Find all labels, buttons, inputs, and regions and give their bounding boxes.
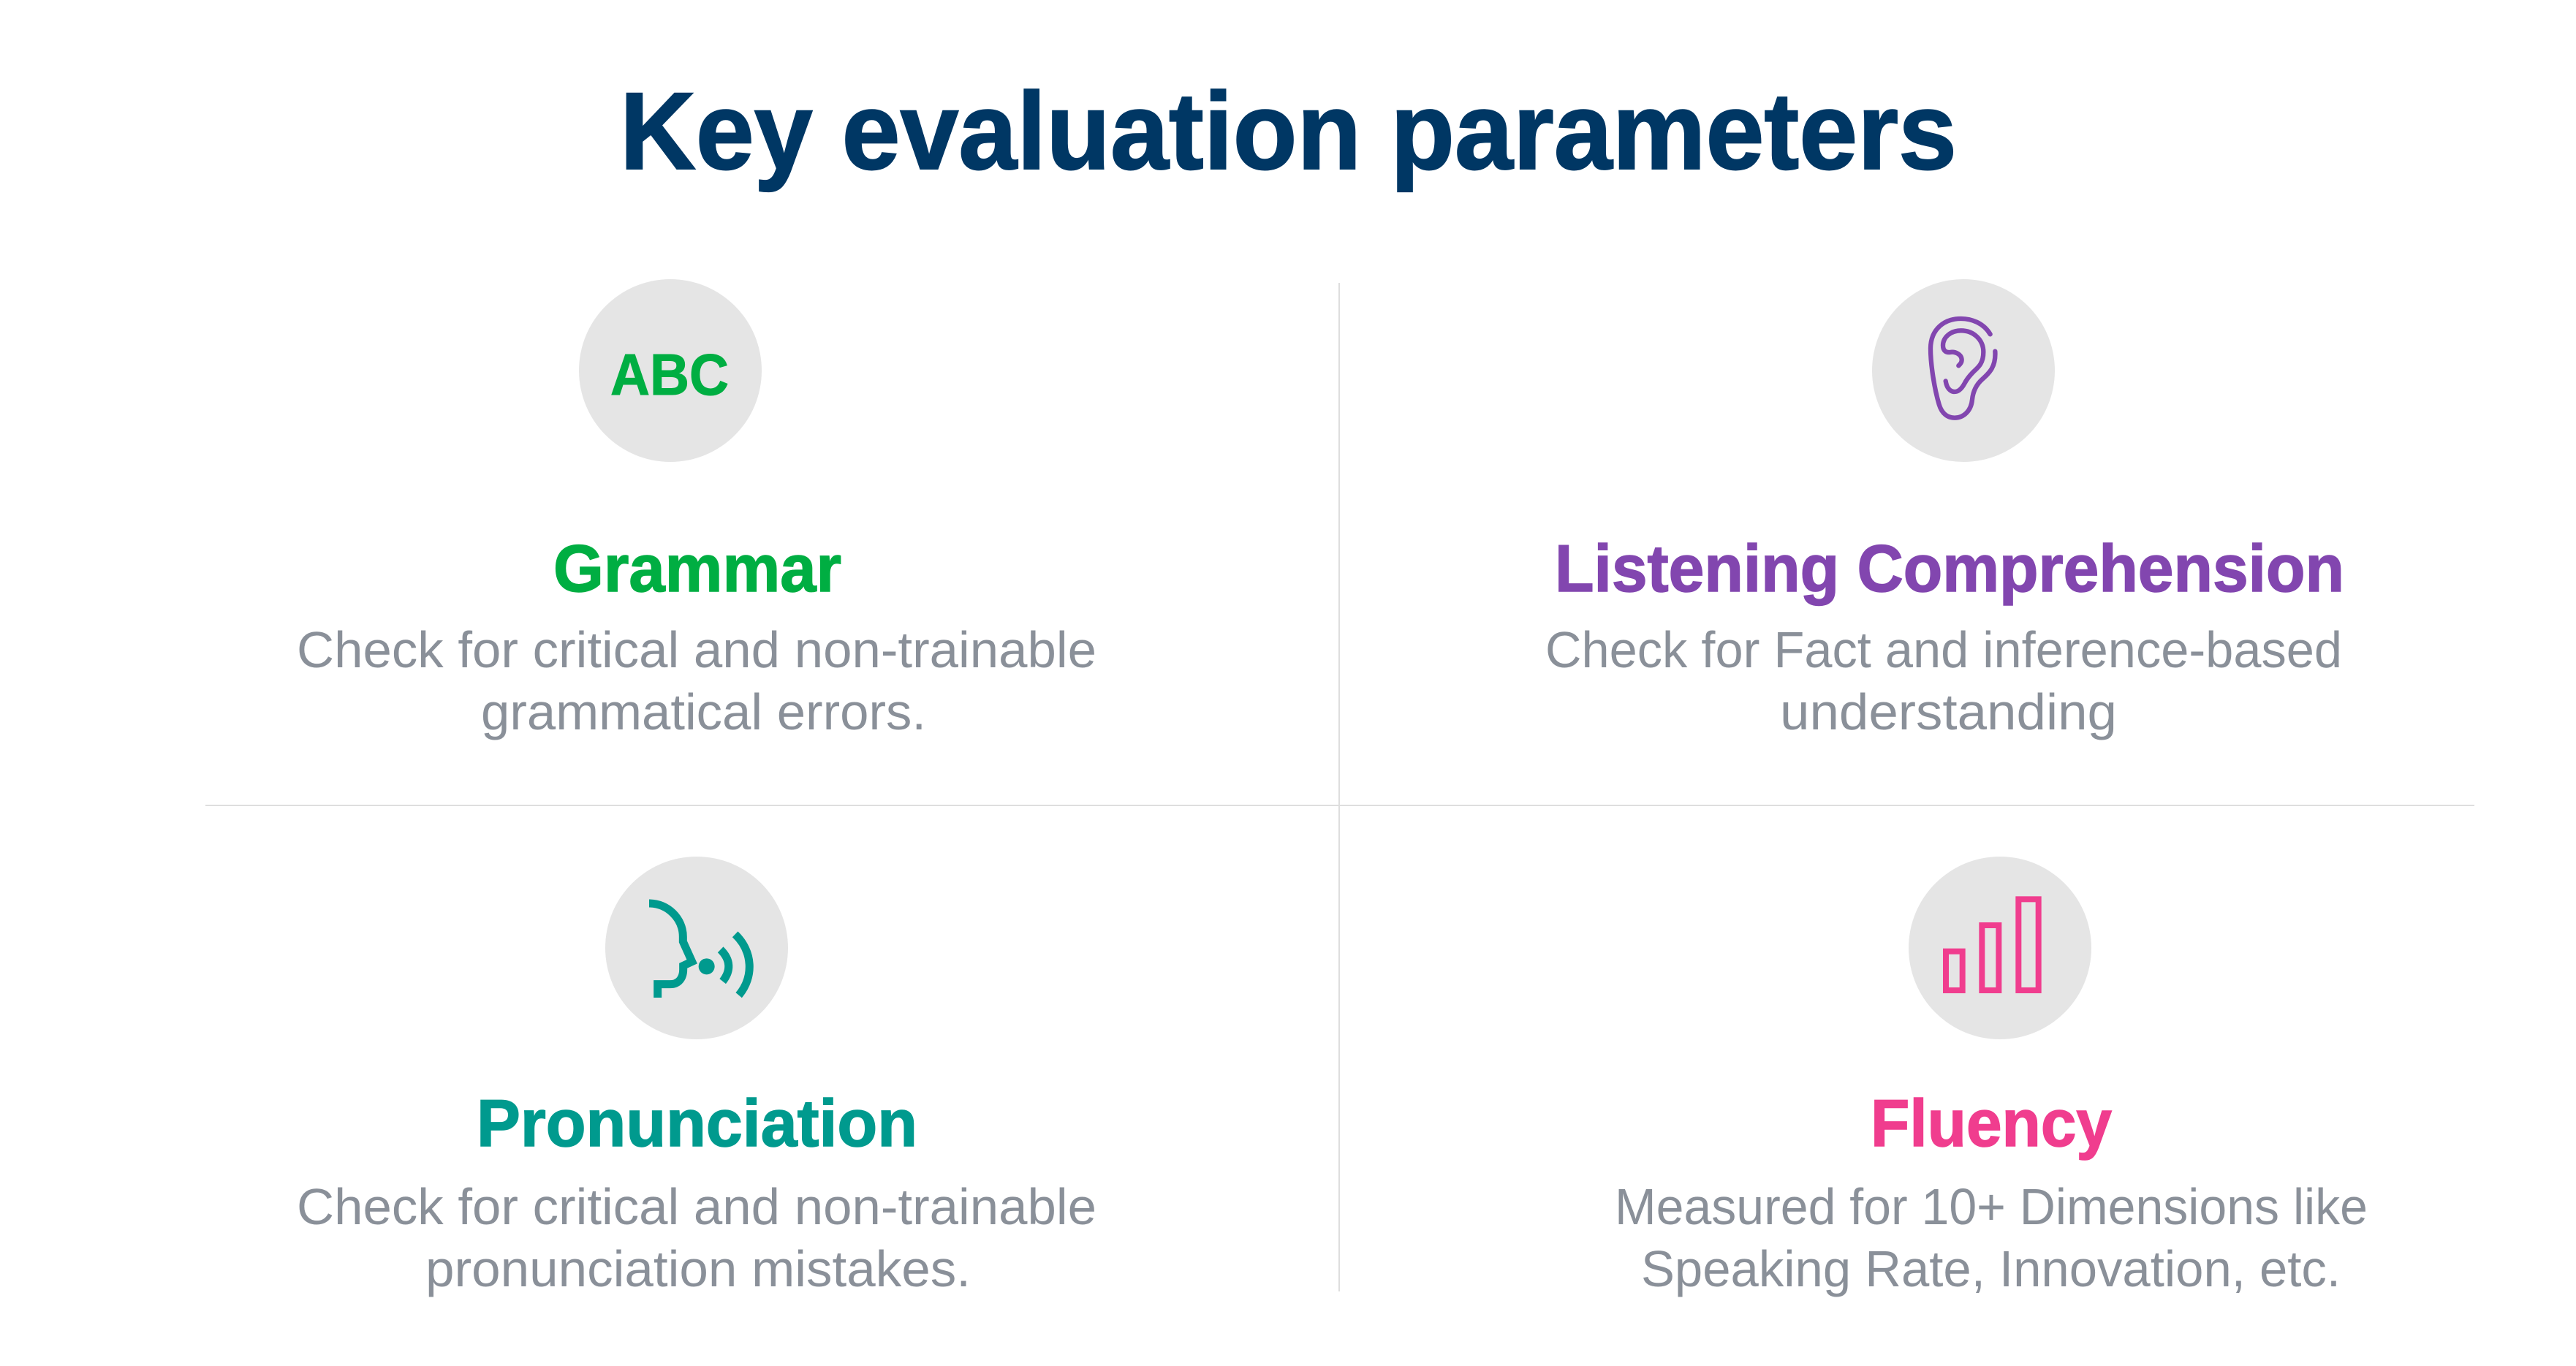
text block: grammar description xyxy=(297,621,1096,740)
text block: fluency description: Speaking Rate, Innovation, etc. xyxy=(1641,1240,2341,1297)
icon: ABC: ABC xyxy=(610,342,729,407)
icon: ear xyxy=(1872,279,2055,462)
panel: grammar xyxy=(297,279,1096,740)
text block: fluency description: Measured for 10+ Dimensions like xyxy=(1615,1178,2368,1235)
text block: listening description xyxy=(1545,621,2342,740)
heading: fluency: Fluency xyxy=(1871,1087,2112,1161)
panel: listening comprehension xyxy=(1545,279,2344,740)
text block: listening description: Check for Fact and inference-based xyxy=(1545,621,2342,678)
text block: grammar description: Check for critical and non-trainable xyxy=(297,621,1096,678)
title: Key evaluation parameters xyxy=(620,69,1957,192)
heading: listening comprehension: Listening Comprehension xyxy=(1555,532,2344,606)
icon: ABC xyxy=(579,279,762,462)
panel: pronunciation xyxy=(297,857,1096,1297)
panel: fluency xyxy=(1615,857,2368,1297)
text block: pronunciation description: pronunciation mistakes. xyxy=(425,1240,971,1297)
icon: speaking head xyxy=(605,857,788,1039)
text block: pronunciation description: Check for critical and non-trainable xyxy=(297,1178,1096,1235)
heading: grammar: Grammar xyxy=(553,532,841,606)
text block: listening description: understanding xyxy=(1780,683,2117,740)
text block: grammar description: grammatical errors. xyxy=(481,683,926,740)
icon: bar chart xyxy=(1909,857,2091,1039)
text block: fluency description xyxy=(1615,1178,2368,1297)
text block: pronunciation description xyxy=(297,1178,1096,1297)
heading: pronunciation: Pronunciation xyxy=(477,1087,917,1161)
